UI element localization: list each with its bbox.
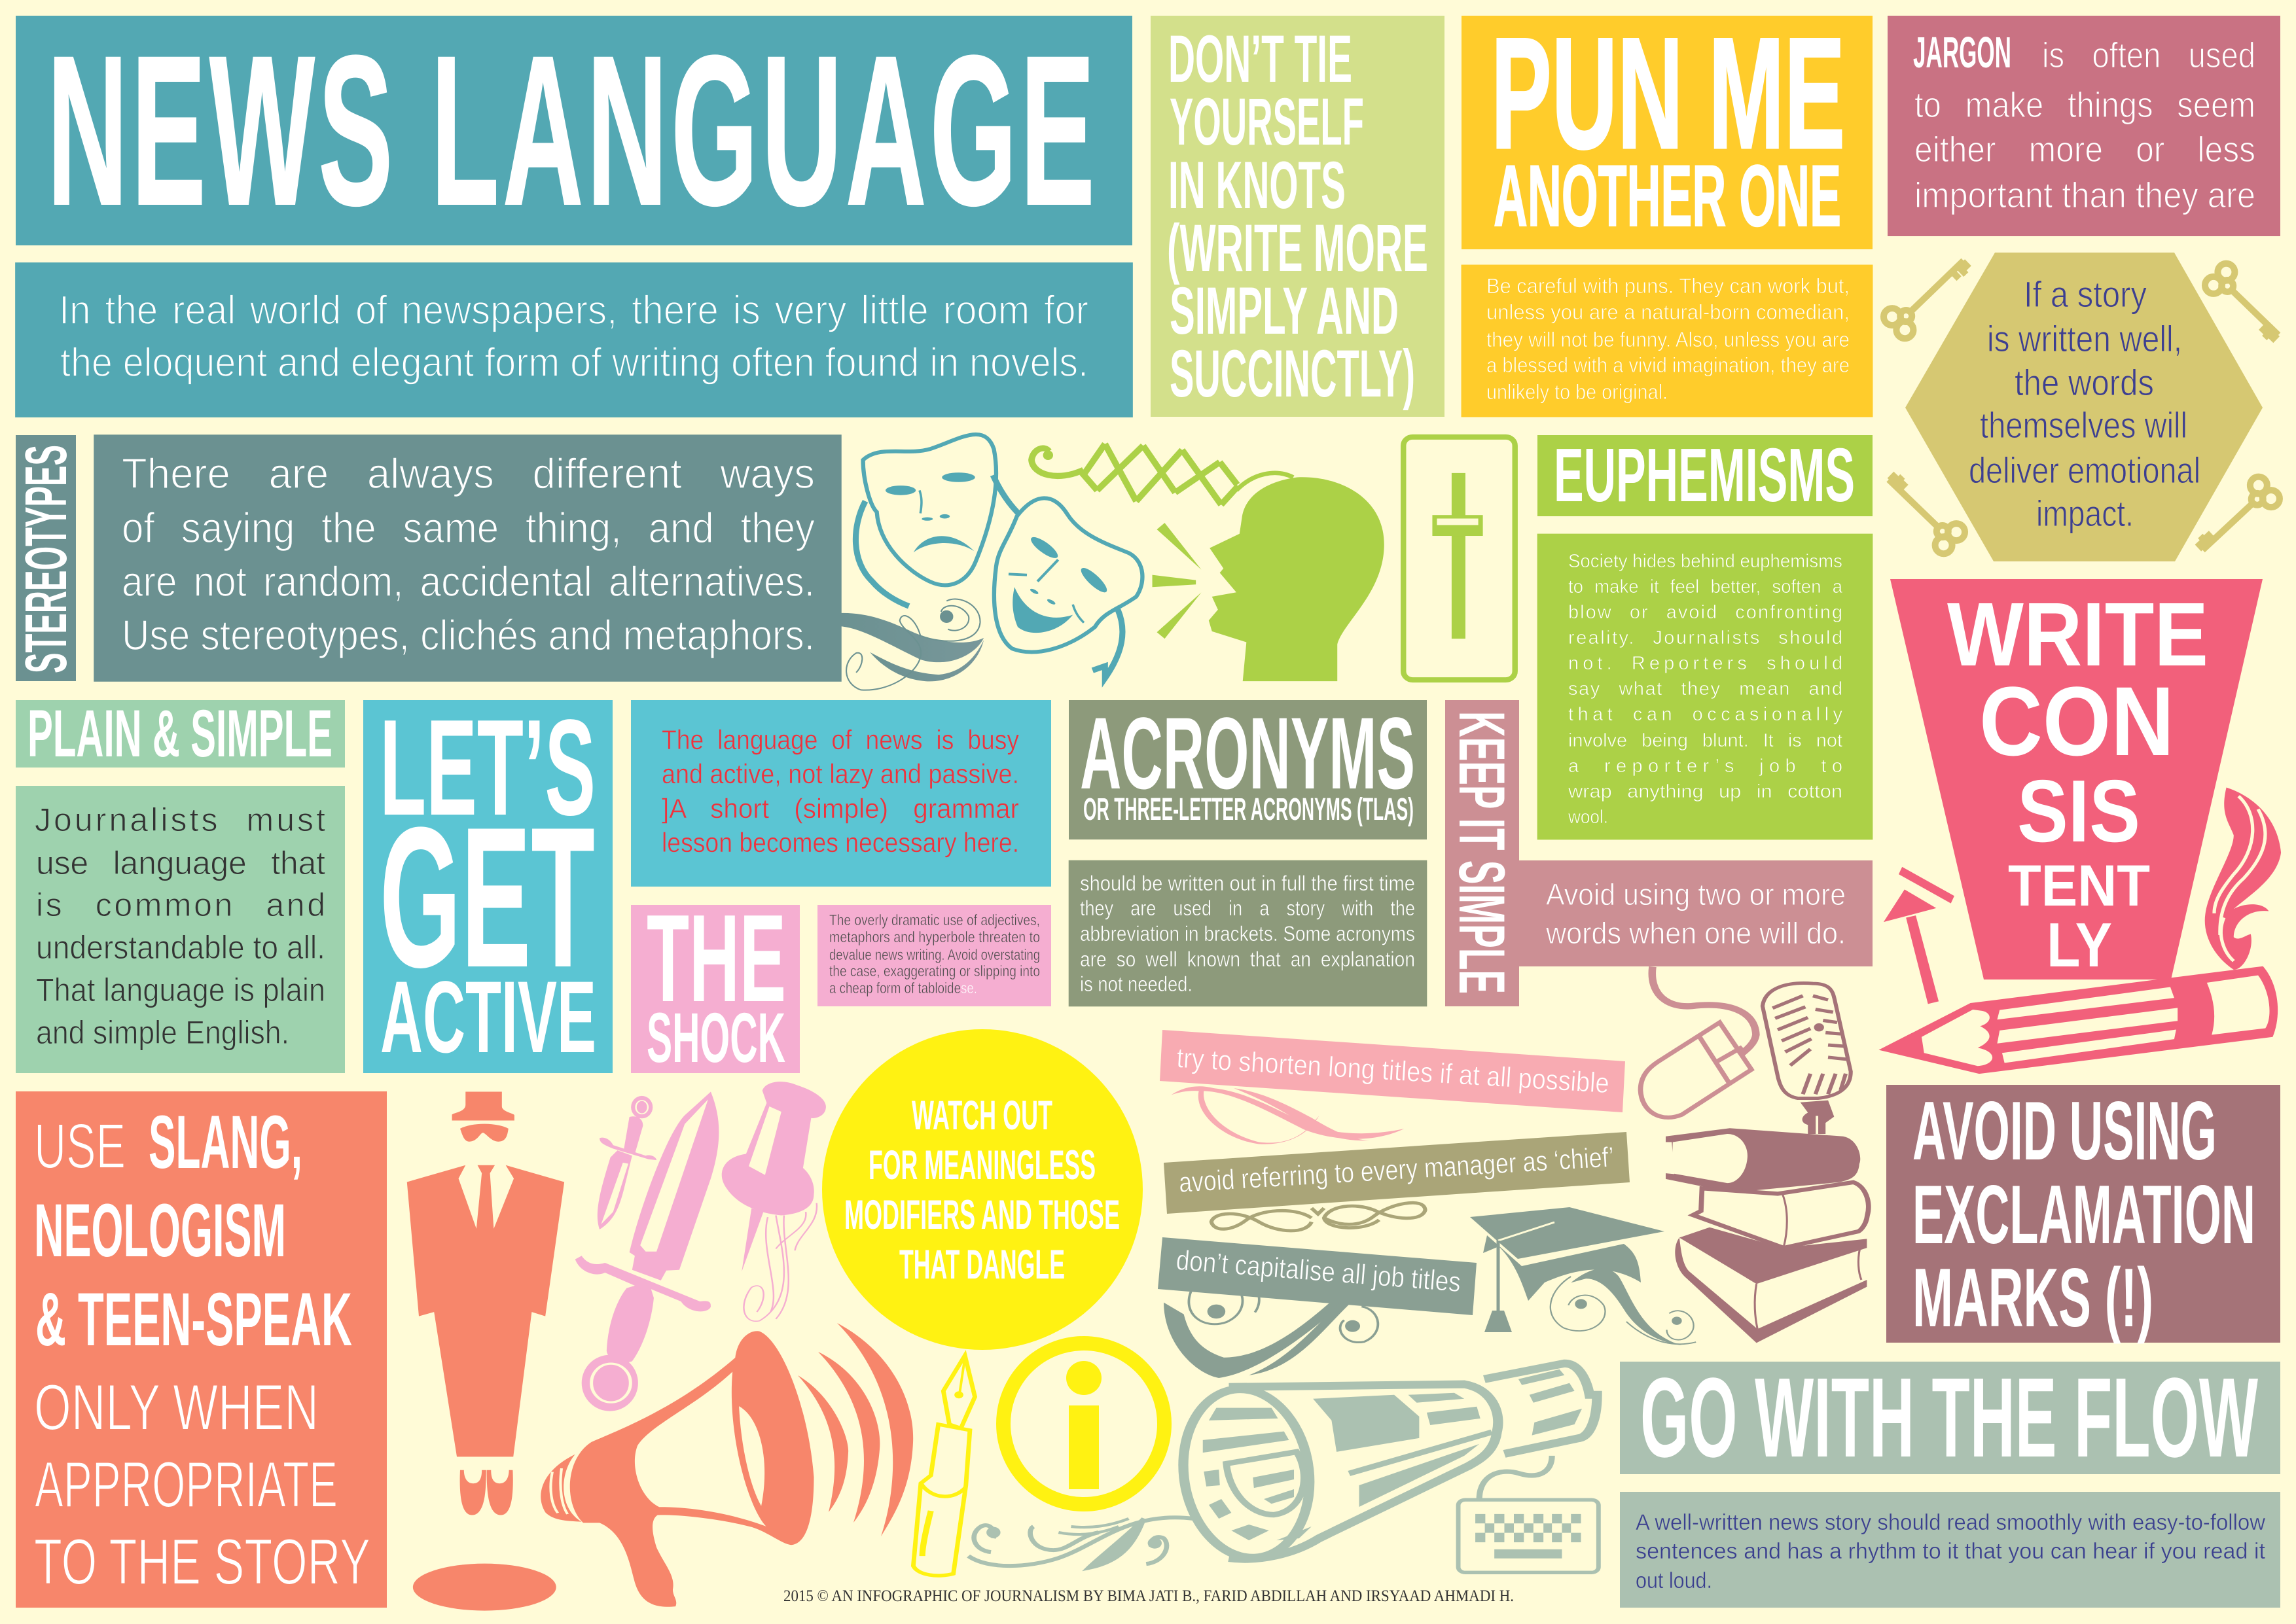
panel: write consistently: WRITE	[1947, 584, 2208, 685]
panel: journalists text	[16, 786, 345, 1073]
panel: journalists text: and simple English.	[36, 1014, 289, 1051]
icon: keyboard	[1458, 1456, 1598, 1572]
icon: key bottom left	[1876, 467, 1968, 557]
panel: write consistently	[1890, 579, 2263, 980]
panel: hexagon quote: deliver emotional	[1969, 450, 2200, 491]
icon: graduation cap	[1470, 1207, 1664, 1332]
panel: shock text: devalue news writing. Avoid overstating	[829, 946, 1040, 963]
panel: language of news: and active, not lazy and passive.	[662, 758, 1019, 789]
panel: keep it simple label and text: words when one will do.	[1545, 916, 1846, 950]
panel: let's get active: LET’S	[380, 692, 596, 844]
panel: don't tie yourself in knots: (WRITE MORE	[1167, 211, 1428, 285]
panel: stereotypes text: of saying the same thing, and they	[122, 504, 815, 552]
panel: write consistently: CON	[1979, 666, 2174, 776]
banner: shorten long titles: try to shorten long titles if at all possible	[1175, 1042, 1610, 1099]
panel: euphemisms text: blow or avoid confronting	[1568, 602, 1842, 623]
icon: up arrow	[1884, 867, 1954, 1004]
panel: shock text: the case, exaggerating or slipping into	[829, 962, 1040, 980]
panel: language of news: lesson becomes necessary here.	[662, 827, 1019, 858]
icon: stack of books	[1666, 1128, 1869, 1343]
panel: use slang: TO THE STORY	[34, 1525, 370, 1598]
panel: avoid exclamation marks	[1886, 1084, 2280, 1344]
panel: don't tie yourself in knots: DON’T TIE	[1168, 22, 1352, 96]
icon: sword and dagger	[575, 1091, 719, 1411]
panel: use slang	[16, 1091, 387, 1608]
panel: pun me another one heading: ANOTHER ONE	[1494, 148, 1841, 245]
panel: pun text: a blessed with a vivid imagination, they are	[1486, 353, 1850, 377]
icon: rolled newspaper	[1175, 1364, 1597, 1562]
panel: euphemisms text: not. Reporters should	[1568, 653, 1842, 674]
panel: go with the flow text: sentences and has a rhythm to it that you can hear if you read it	[1636, 1539, 2266, 1564]
icon: speaking head	[1031, 444, 1384, 681]
panel: journalists text: is common and	[36, 887, 325, 923]
banner: avoid referring: avoid referring to every manager as ‘chief’	[1178, 1142, 1615, 1199]
icon: exclamation suit man	[407, 1091, 564, 1611]
panel: go with the flow text: A well-written news story should read smoothly with easy-to-follow	[1636, 1510, 2265, 1535]
panel: write consistently: LY	[2047, 910, 2112, 980]
banner: shorten long titles	[1160, 1030, 1625, 1112]
panel: pun text: unlikely to be original.	[1486, 380, 1668, 404]
banner: don't capitalise	[1158, 1237, 1477, 1315]
icon: framed cross	[1403, 437, 1515, 680]
icon: pencil	[1878, 966, 2278, 1074]
panel: hexagon quote: is written well,	[1987, 318, 2182, 359]
icon: pink flourish	[1172, 1086, 1404, 1144]
panel: hexagon quote: If a story	[2024, 274, 2147, 315]
panel: watch out circle: FOR MEANINGLESS	[869, 1142, 1096, 1188]
panel: jargon: is often used	[2042, 35, 2255, 75]
icon: info circle	[1003, 1343, 1164, 1504]
icon: computer mouse	[1640, 966, 1756, 1118]
icon: key bottom right	[2191, 473, 2283, 563]
panel: the shock	[631, 889, 800, 1077]
panel: jargon: JARGON	[1913, 28, 2011, 77]
panel: don't tie yourself in knots: YOURSELF	[1170, 84, 1364, 159]
panel: stereotypes text	[94, 435, 841, 681]
icon: wave flourish	[838, 599, 984, 690]
panel: watch out circle: WATCH OUT	[912, 1093, 1052, 1139]
copyright credit: 2015 © AN INFOGRAPHIC OF JOURNALISM BY BIMA JATI B., FARID ABDILLAH AND IRSYAAD AHMADI H.	[783, 1587, 1514, 1605]
panel: shock text: The overly dramatic use of adjectives,	[829, 911, 1040, 928]
panel: euphemisms text: say what they mean and	[1568, 679, 1842, 699]
icon: key top right	[2202, 260, 2291, 347]
panel: don't tie yourself in knots: IN KNOTS	[1168, 148, 1346, 222]
panel: watch out circle	[822, 1029, 1143, 1350]
panel: language of news	[631, 700, 1051, 887]
icon: megaphone	[541, 1331, 814, 1607]
panel: pun text: Be careful with puns. They can work but,	[1486, 274, 1850, 298]
panel: acronyms text: they are used in a story with the	[1080, 896, 1415, 920]
panel: the shock: THE	[647, 889, 786, 1028]
panel: euphemisms text: wool.	[1568, 807, 1608, 828]
panel: euphemisms text: Society hides behind euphemisms	[1568, 551, 1842, 572]
panel: pun text	[1462, 265, 1873, 417]
heading: plain and simple	[16, 696, 345, 771]
panel: write consistently: SIS	[2017, 762, 2140, 860]
panel: go with the flow text	[1620, 1492, 2280, 1608]
icon: sound waves	[798, 1323, 913, 1536]
panel: use slang: USE	[34, 1110, 126, 1182]
panel: pun me another one heading	[1462, 5, 1873, 249]
panel: acronyms text: should be written out in full the first time	[1080, 872, 1415, 895]
icon: happy mask	[994, 498, 1142, 678]
panel: hexagon quote: themselves will	[1980, 404, 2187, 446]
panel: stereotypes text: Use stereotypes, clichés and metaphors.	[122, 611, 815, 659]
panel: don't tie yourself in knots: SUCCINCTLY)	[1170, 336, 1415, 411]
icon: olive flourish	[1211, 1203, 1426, 1231]
banner: avoid referring	[1164, 1132, 1630, 1214]
panel: journalists text: That language is plain	[36, 972, 325, 1008]
heading: plain and simple: PLAIN & SIMPLE	[27, 696, 332, 771]
heading: euphemisms: EUPHEMISMS	[1554, 432, 1855, 518]
panel: acronyms text: is not needed.	[1080, 972, 1193, 996]
panel: intro text	[16, 263, 1132, 417]
panel: euphemisms text: that can occasionally	[1568, 704, 1843, 725]
panel: language of news: The language of news is busy	[662, 724, 1019, 755]
panel: use slang: ONLY WHEN	[34, 1371, 319, 1443]
heading: acronyms: ACRONYMS	[1080, 697, 1415, 811]
heading: acronyms: OR THREE-LETTER ACRONYMS (TLAS)	[1083, 792, 1414, 827]
panel: use slang: APPROPRIATE	[35, 1448, 338, 1521]
panel: use slang: & TEEN-SPEAK	[35, 1278, 352, 1362]
icon: fountain pen	[913, 1356, 975, 1576]
panel: stereotypes text: There are always different ways	[122, 450, 815, 497]
panel: keep it simple label and text: Avoid using two or more	[1546, 877, 1846, 911]
icon: zigzag speech scroll	[1031, 444, 1293, 504]
panel: the shock: SHOCK	[647, 998, 785, 1077]
heading: acronyms	[1069, 697, 1427, 839]
panel: shock text: metaphors and hyperbole threaten to	[829, 928, 1040, 945]
panel: intro text: In the real world of newspapers, there is very little room for	[59, 288, 1088, 333]
icon: grey swirl	[1551, 1269, 1696, 1345]
panel: let's get active	[363, 692, 613, 1074]
panel: euphemisms text: reality. Journalists should	[1568, 627, 1842, 648]
icon: theatre masks	[838, 434, 1142, 690]
panel: use slang: SLANG,	[149, 1101, 302, 1184]
panel: journalists text: use language that	[36, 845, 325, 881]
panel: stereotypes vertical label	[14, 435, 79, 681]
panel: euphemisms text: to make it feel better, soften a	[1568, 576, 1843, 597]
panel: use slang: NEOLOGISM	[34, 1189, 286, 1273]
icon: key top left	[1880, 248, 1976, 342]
panel: acronyms text: are so well known that an explanation	[1080, 947, 1415, 971]
icon: leaf flourish	[969, 1517, 1194, 1568]
icon: vintage microphone	[1763, 983, 1851, 1134]
icon: sad mask	[855, 434, 1022, 606]
heading: euphemisms	[1537, 432, 1873, 518]
panel: watch out circle: THAT DANGLE	[899, 1242, 1065, 1288]
panel: euphemisms text: wrap anything up in cotton	[1568, 781, 1842, 802]
panel: jargon: important than they are	[1914, 175, 2255, 215]
panel: intro text: the eloquent and elegant form of writing often found in novels.	[60, 340, 1088, 385]
panel: jargon: to make things seem	[1914, 84, 2255, 125]
panel: hexagon quote: impact.	[2036, 493, 2134, 534]
panel: euphemisms text: a reporter’s job to	[1568, 756, 1842, 777]
panel: go with the flow text: out loud.	[1636, 1568, 1712, 1593]
banner: don't capitalise: don’t capitalise all job titles	[1175, 1244, 1462, 1298]
panel: jargon	[1888, 16, 2280, 236]
panel: don't tie yourself in knots	[1151, 16, 1444, 417]
panel: pun text: they will not be funny. Also, unless you are	[1486, 328, 1850, 351]
panel: euphemisms text: involve being blunt. It is not	[1568, 730, 1842, 751]
panel: hexagon quote: the words	[2015, 362, 2154, 403]
title panel: NEWS LANGUAGE	[47, 12, 1098, 250]
panel: pun text: unless you are a natural-born comedian,	[1486, 300, 1850, 324]
panel: shock text: a cheap form of tabloidese.	[829, 980, 977, 997]
icon: flame	[2205, 788, 2281, 970]
panel: language of news: ]A short (simple) grammar	[662, 793, 1019, 824]
panel: journalists text: Journalists must	[35, 802, 325, 838]
icon: grey flourish	[1164, 1291, 1378, 1378]
panel: stereotypes text: are not random, accidental alternatives.	[122, 557, 815, 605]
icon: push pin	[722, 1082, 826, 1321]
panel: keep it simple label and text	[1445, 700, 1873, 1006]
panel: don't tie yourself in knots: SIMPLY AND	[1170, 274, 1399, 348]
panel: journalists text: understandable to all.	[36, 929, 325, 966]
panel: acronyms text	[1069, 860, 1427, 1006]
panel: write consistently: TENT	[2008, 853, 2150, 918]
panel: keep it simple label and text: KEEP IT SIMPLE	[1446, 711, 1518, 994]
panel: euphemisms text	[1537, 534, 1873, 839]
panel: stereotypes vertical label: STEREOTYPES	[14, 445, 79, 673]
panel: shock text	[817, 905, 1051, 1006]
panel: pun me another one heading: PUN ME	[1491, 5, 1845, 182]
panel: watch out circle: MODIFIERS AND THOSE	[844, 1192, 1120, 1238]
panel: jargon: either more or less	[1914, 129, 2255, 169]
panel: let's get active: GET	[380, 785, 595, 1009]
title panel	[16, 12, 1132, 250]
panel: let's get active: ACTIVE	[380, 961, 596, 1074]
panel: acronyms text: abbreviation in brackets. Some acronyms	[1080, 922, 1415, 945]
panel: hexagon quote	[1905, 253, 2263, 561]
